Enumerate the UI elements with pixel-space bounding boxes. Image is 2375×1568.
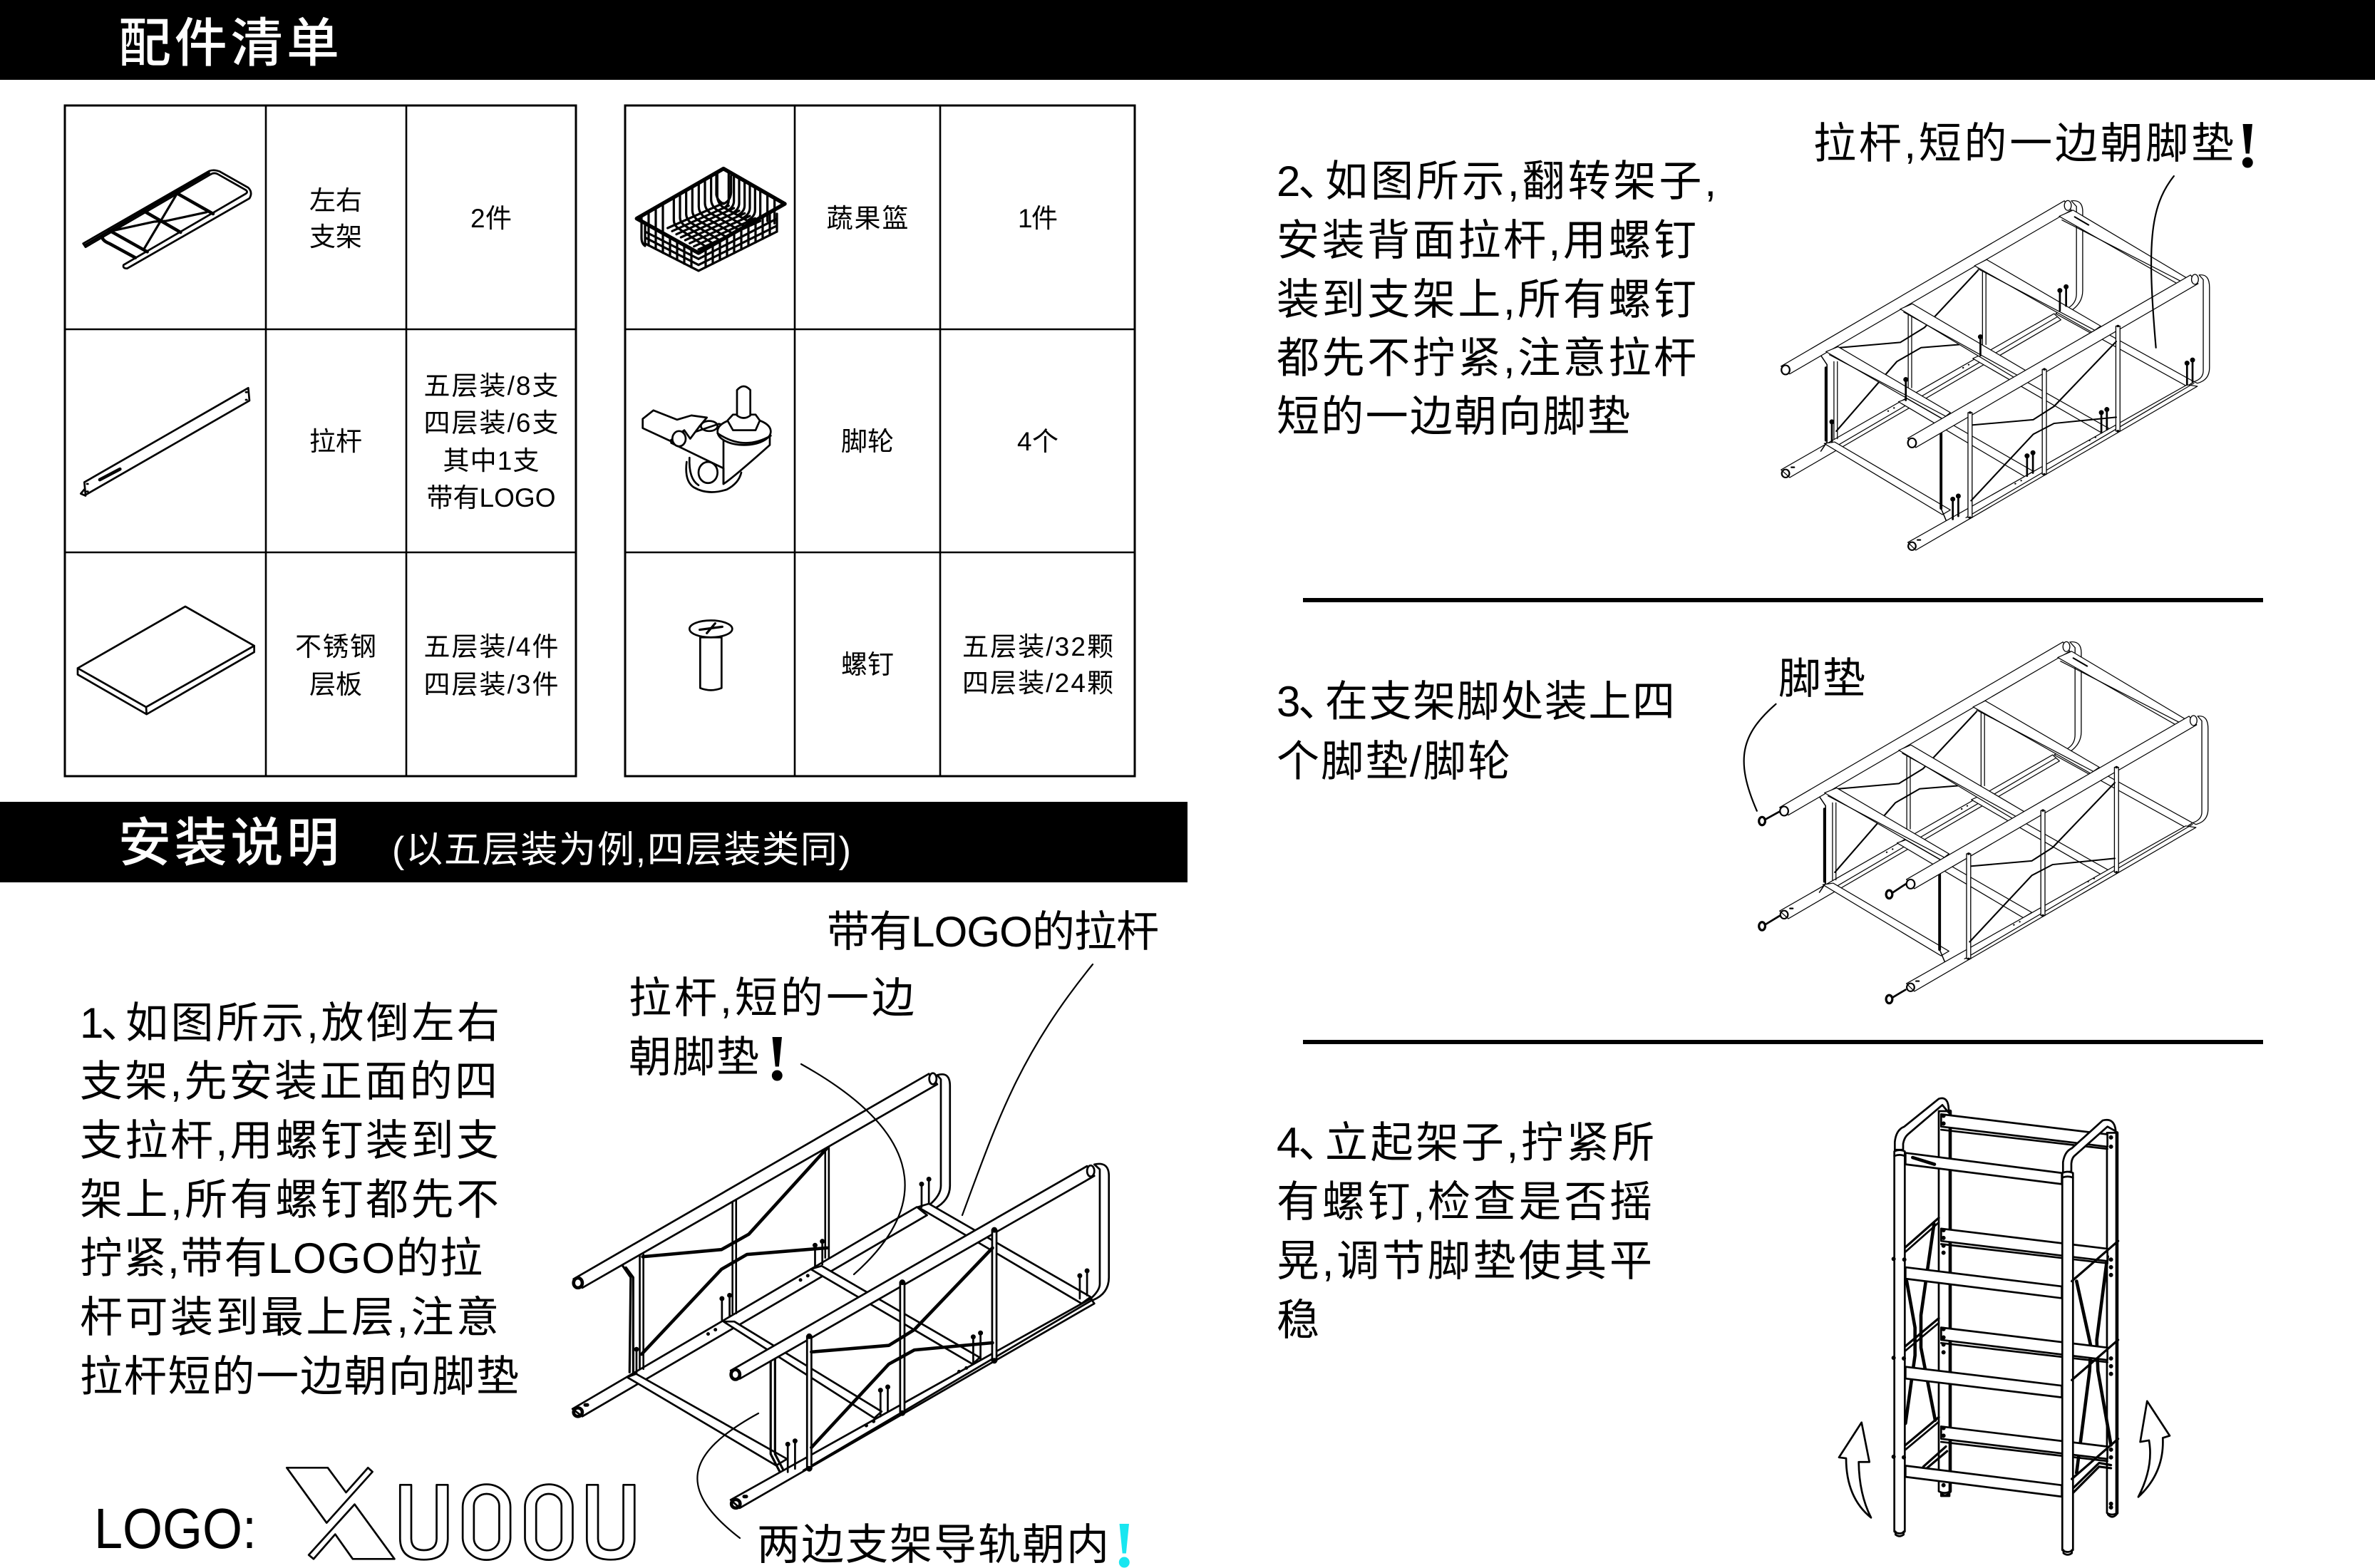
step 4 text: 晃,调节脚垫使其平 bbox=[1277, 1237, 1652, 1285]
step 3 label: 脚垫 bbox=[1778, 655, 1865, 703]
logo label: LOGO: bbox=[94, 1497, 257, 1560]
icon: side frame bbox=[83, 170, 251, 269]
table text right: 1件 bbox=[1018, 204, 1058, 233]
step 1 text: 支拉杆,用螺钉装到支 bbox=[80, 1117, 499, 1165]
step 1 frame illustration bbox=[572, 1073, 1109, 1508]
step 3 text: 、 bbox=[1298, 678, 1341, 726]
parts table right bbox=[625, 105, 1135, 776]
parts table left bbox=[65, 105, 576, 776]
step 2 frame illustration bbox=[1781, 176, 2210, 550]
table text left: 拉杆 bbox=[309, 427, 362, 456]
mark: exclamation: ! bbox=[766, 1021, 788, 1094]
divider bbox=[1303, 1040, 2263, 1044]
header bar: parts list bbox=[0, 0, 2375, 80]
step 4 text: 立起架子,拧紧所 bbox=[1325, 1119, 1654, 1167]
step 2 text: 短的一边朝向脚垫 bbox=[1277, 393, 1630, 440]
step 2 text: 安装背面拉杆,用螺钉 bbox=[1277, 217, 1696, 264]
table text left: 2件 bbox=[470, 204, 512, 233]
step 1 labels: 两边支架导轨朝内 bbox=[757, 1521, 1109, 1568]
step 3 text: 在支架脚处装上四 bbox=[1325, 678, 1675, 726]
icon: caster wheel bbox=[643, 386, 771, 492]
step 2 label: 拉杆,短的一边朝脚垫 bbox=[1813, 120, 2234, 167]
step 2 text: 如图所示,翻转架子, bbox=[1325, 158, 1716, 205]
table text left: 左右 bbox=[309, 186, 362, 215]
step 1 text: 1 bbox=[80, 999, 103, 1047]
step 1 text: 如图所示,放倒左右 bbox=[125, 999, 500, 1047]
icon: screw bbox=[689, 620, 732, 690]
step 1 text: 杆可装到最上层,注意 bbox=[80, 1294, 499, 1341]
step 2 text: 都先不拧紧,注意拉杆 bbox=[1277, 334, 1696, 382]
header bar: parts list: 配件清单 bbox=[118, 14, 339, 73]
step 1 labels: 带有LOGO的拉杆 bbox=[827, 908, 1159, 956]
header bar: install instructions: (以五层装为例,四层装类同) bbox=[392, 830, 851, 871]
divider bbox=[1303, 598, 2263, 602]
step 3 text: 个脚垫/脚轮 bbox=[1277, 738, 1510, 785]
table text left: 四层装/3件 bbox=[423, 670, 559, 699]
table text left: 其中1支 bbox=[443, 446, 539, 475]
step 1 text: 、 bbox=[101, 999, 143, 1047]
callout lines step 1 bbox=[697, 964, 1093, 1538]
step 1 labels bbox=[629, 908, 1159, 1568]
logo outline mark bbox=[287, 1468, 634, 1560]
step 1 labels: 拉杆,短的一边 bbox=[629, 974, 915, 1022]
table text left: 支架 bbox=[309, 222, 362, 252]
step 1 text: 支架,先安装正面的四 bbox=[80, 1058, 498, 1105]
step 3 frame illustration bbox=[1780, 641, 2208, 991]
header bar: install instructions bbox=[0, 802, 1188, 882]
step 3 text bbox=[1277, 678, 1675, 785]
table text left: 层板 bbox=[309, 670, 362, 699]
arrow right bbox=[2138, 1401, 2170, 1497]
callout line step 2 bbox=[2151, 176, 2174, 348]
arrow left bbox=[1839, 1423, 1871, 1517]
step 4 text: 稳 bbox=[1277, 1296, 1319, 1344]
table text right: 螺钉 bbox=[841, 650, 894, 679]
step 4 text: 4 bbox=[1277, 1119, 1300, 1167]
step 4 text bbox=[1277, 1119, 1654, 1344]
table text left bbox=[295, 186, 559, 699]
table text right: 脚轮 bbox=[841, 427, 894, 456]
table text left: 五层装/8支 bbox=[423, 371, 559, 401]
table text right bbox=[827, 204, 1113, 698]
step 3 foot pads and callout bbox=[1744, 704, 1905, 1004]
step 2 text: 2 bbox=[1277, 158, 1300, 205]
step 1 text: 拉杆短的一边朝向脚垫 bbox=[80, 1353, 519, 1401]
icon: basket bbox=[637, 169, 785, 271]
step 4 text: 有螺钉,检查是否摇 bbox=[1277, 1178, 1652, 1226]
step 2 text: 装到支架上,所有螺钉 bbox=[1277, 276, 1696, 324]
step 2 text bbox=[1277, 158, 1716, 440]
table text right: 4个 bbox=[1017, 427, 1058, 456]
table text left: 五层装/4件 bbox=[423, 632, 559, 661]
table text right: 五层装/32颗 bbox=[962, 632, 1113, 661]
table text left: 不锈钢 bbox=[295, 632, 376, 661]
step 1 text: 架上,所有螺钉都先不 bbox=[80, 1176, 499, 1224]
step 1 text bbox=[80, 999, 519, 1401]
header bar: install instructions: 安装说明 bbox=[118, 813, 339, 872]
step 2 text: 、 bbox=[1298, 158, 1341, 205]
step 4 text: 、 bbox=[1298, 1119, 1341, 1167]
table text right: 蔬果篮 bbox=[827, 204, 908, 233]
icon: steel shelf board bbox=[78, 607, 254, 714]
mark: exclamation step 2: ! bbox=[2237, 108, 2259, 181]
step 4 upright rack illustration bbox=[1839, 1098, 2170, 1554]
table text left: 带有LOGO bbox=[426, 483, 556, 512]
icon: cross bar bbox=[81, 388, 249, 496]
table text left: 四层装/6支 bbox=[423, 408, 559, 438]
step 1 labels: 朝脚垫 bbox=[629, 1033, 759, 1081]
table text right: 四层装/24颗 bbox=[962, 669, 1113, 698]
step 3 text: 3 bbox=[1277, 678, 1300, 726]
step 1 text: 拧紧,带有LOGO的拉 bbox=[80, 1234, 483, 1282]
